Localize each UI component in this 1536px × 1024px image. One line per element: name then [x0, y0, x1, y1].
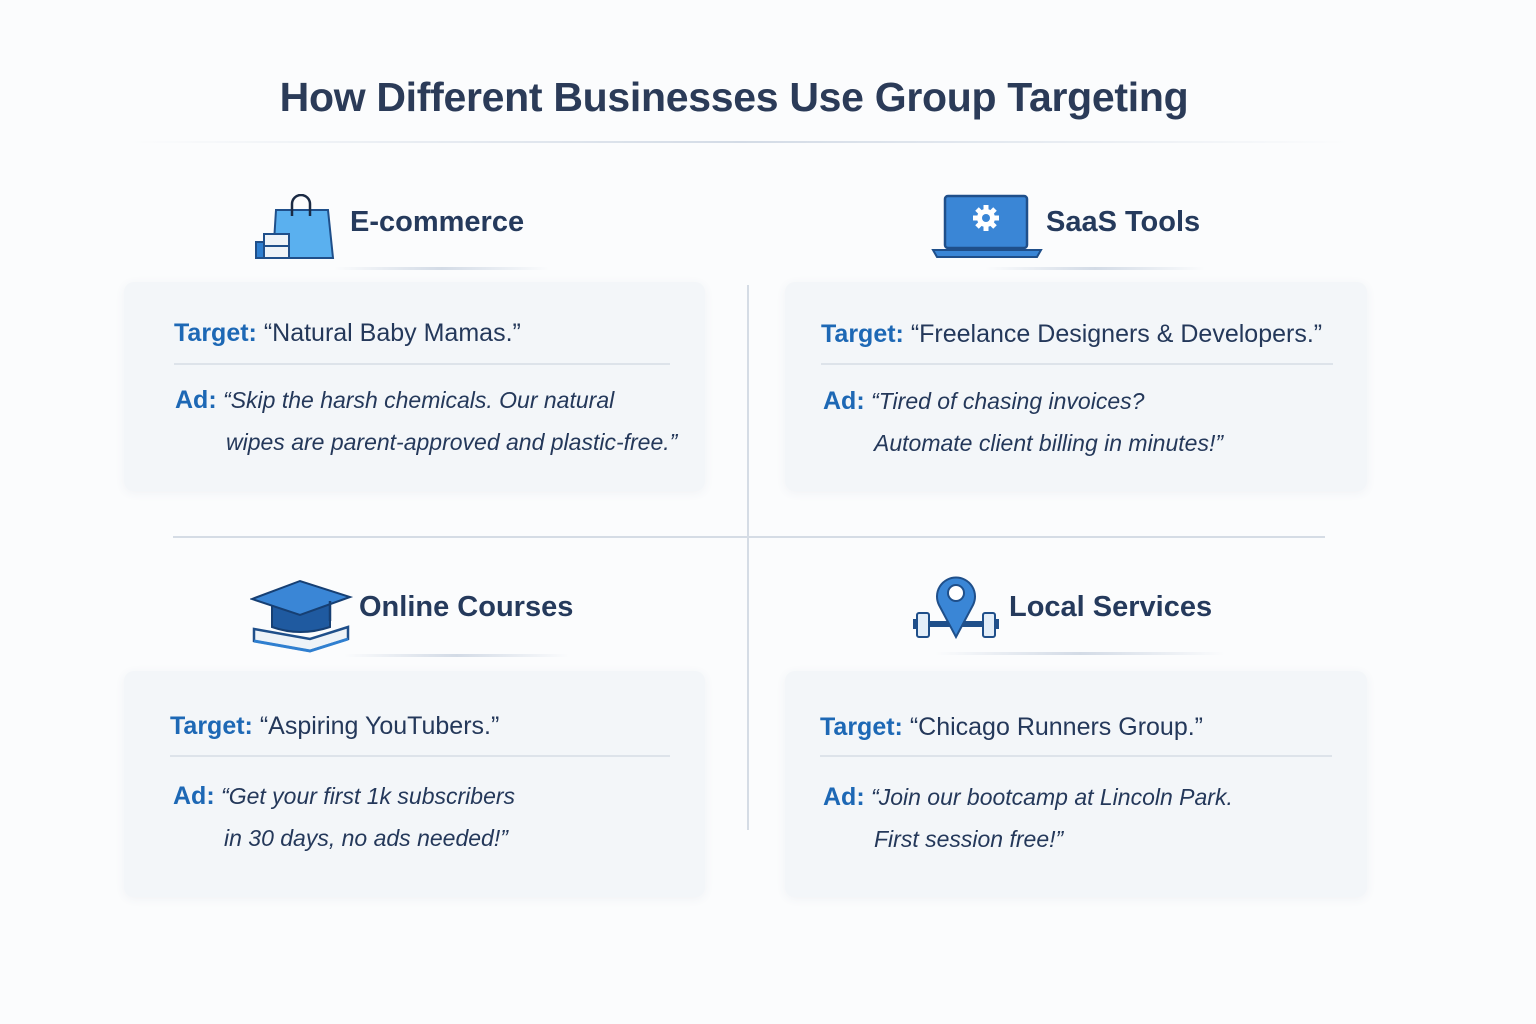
ad: Ad: “Get your first 1k subscribers	[173, 782, 515, 810]
panel: saas	[821, 194, 1333, 456]
card	[785, 282, 1367, 491]
ad: Ad: “Skip the harsh chemicals. Our natural	[175, 386, 614, 414]
ad	[175, 386, 678, 455]
heading: SaaS Tools	[1046, 206, 1200, 238]
heading: E-commerce	[350, 206, 524, 238]
card	[785, 671, 1367, 897]
icon: laptop	[931, 194, 1043, 258]
ad: Ad: “Join our bootcamp at Lincoln Park.	[823, 783, 1233, 811]
ad: Ad: “Tired of chasing invoices?	[823, 387, 1144, 415]
heading: Local Services	[1009, 591, 1212, 623]
title: How Different Businesses Use Group Targeting	[280, 74, 1188, 120]
target: Target: “Freelance Designers & Developers.”	[821, 320, 1322, 348]
icon: graduation cap on book	[250, 580, 353, 652]
panel: local services	[820, 576, 1332, 852]
icon: shopping bag	[255, 194, 334, 259]
target: Target: “Aspiring YouTubers.”	[170, 712, 499, 740]
panel: online courses	[170, 580, 670, 851]
target: Target: “Chicago Runners Group.”	[820, 713, 1203, 741]
ad	[823, 387, 1224, 456]
ad: wipes are parent-approved and plastic-free.”	[226, 429, 677, 455]
card	[124, 282, 705, 491]
panel: e-commerce	[174, 194, 678, 455]
ad: in 30 days, no ads needed!”	[224, 825, 508, 851]
ad: First session free!”	[874, 826, 1063, 852]
icon: pin with dumbbell	[913, 576, 999, 639]
ad	[173, 782, 515, 851]
target: Target: “Natural Baby Mamas.”	[174, 319, 521, 347]
heading: Online Courses	[359, 591, 573, 623]
ad: Automate client billing in minutes!”	[874, 430, 1223, 456]
ad	[823, 783, 1233, 852]
card	[124, 671, 705, 897]
